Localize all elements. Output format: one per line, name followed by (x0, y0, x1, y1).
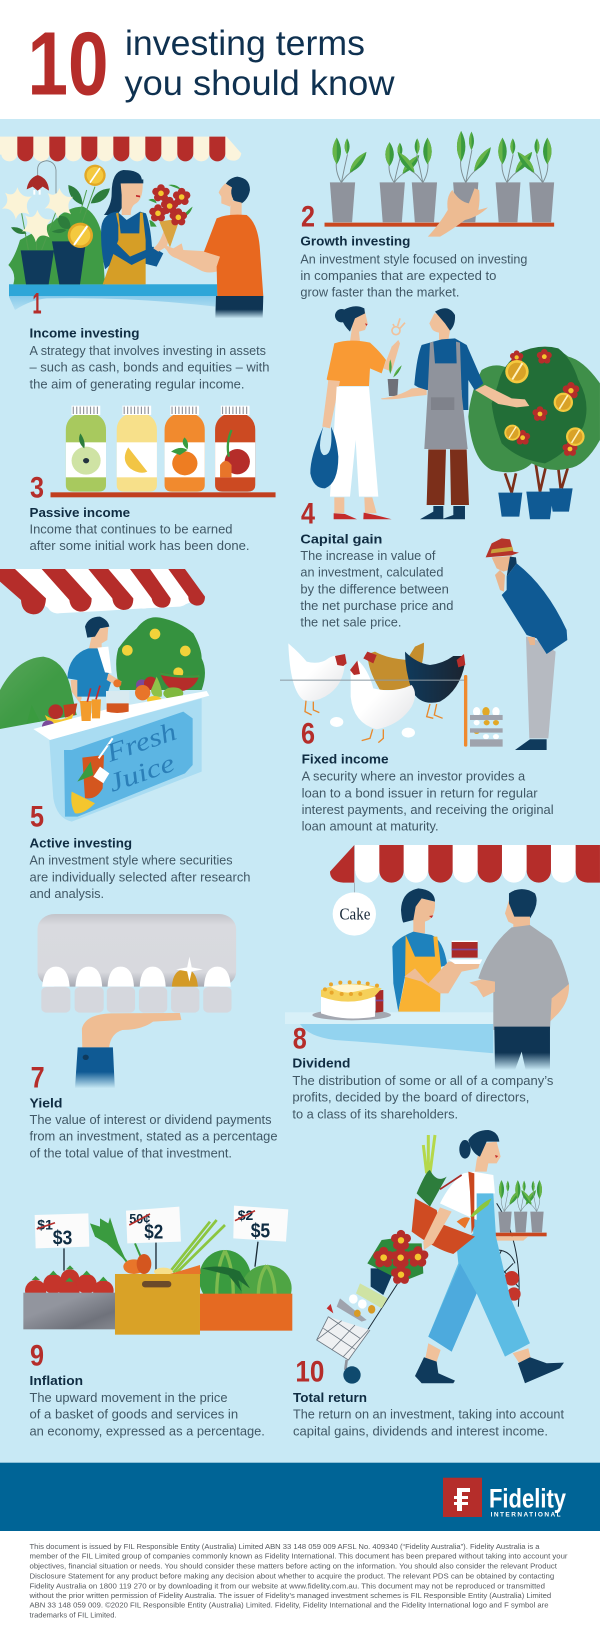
body text: in companies that are expected to (300, 269, 496, 283)
tomatoes (25, 1265, 114, 1301)
brown hen (363, 643, 424, 690)
juice seller (67, 617, 122, 703)
body text (300, 549, 453, 630)
body text: an economy, expressed as a percentage. (30, 1424, 265, 1438)
small plant and hand (381, 359, 427, 399)
illustration: produce crates (23, 1206, 292, 1335)
body text: A security where an investor provides a (302, 770, 525, 784)
body text (293, 1408, 565, 1438)
arm (423, 1207, 452, 1250)
panel: 5 Active investing (0, 569, 251, 901)
price labels: $1 (37, 1216, 53, 1232)
logo (443, 1478, 482, 1517)
heading: Passive income (30, 505, 130, 520)
number 9: 9 (30, 1339, 44, 1372)
woman (310, 306, 405, 519)
number 10: 10 (295, 1356, 324, 1389)
money tree (468, 347, 600, 519)
tray (41, 987, 232, 1013)
fruit tree (116, 617, 205, 690)
fence wire (280, 679, 465, 682)
price labels: $2 (238, 1207, 253, 1223)
body text: loan amount at maturity. (302, 820, 439, 834)
heading: Total return (293, 1390, 367, 1405)
price labels (37, 1207, 270, 1249)
body text: by the difference between (300, 582, 449, 596)
shelf (325, 223, 554, 227)
sign (333, 883, 376, 936)
illustration: plants on shelf (325, 131, 554, 237)
pots (21, 250, 54, 284)
body text: The return on an investment, taking into account (293, 1408, 565, 1422)
illustration: woman with trolley (317, 1130, 564, 1384)
disclaimer: This document is issued by FIL Responsible Entity (Australia) Limited ABN 33 148 059 009 AFSL No. 409340 (“Fidelity Australia”). Fidelity Australia is a (30, 1542, 540, 1551)
icon: F symbol (454, 1488, 470, 1511)
awning (0, 569, 205, 614)
disclaimer: Fidelity Australia on 1800 119 270 or by downloading it from our website at www.fidelity.com.au. This document may not be reproduced or transmitted (30, 1581, 545, 1590)
black hen (405, 652, 465, 718)
shirt (440, 1172, 495, 1220)
heading: Active investing (30, 836, 132, 850)
sign lettering: Juice (105, 748, 178, 798)
body text (30, 1391, 265, 1438)
disclaimer: trademarks of FIL Limited. (30, 1611, 116, 1620)
green bush (0, 657, 77, 729)
title: you should know (124, 64, 395, 103)
body text: A strategy that involves investing in assets (30, 344, 266, 358)
shoulder bag (412, 1135, 492, 1254)
lemon (125, 447, 147, 473)
body text: the net sale price. (300, 616, 401, 630)
number 6: 6 (301, 717, 315, 750)
body text (302, 770, 554, 834)
body text: of the total value of that investment. (30, 1146, 232, 1160)
man (414, 308, 529, 519)
illustration: couple and money tree (310, 306, 600, 519)
body text: The upward movement in the price (30, 1391, 228, 1405)
eggs (330, 717, 415, 738)
body text (300, 252, 527, 299)
price signs (35, 1206, 288, 1248)
number 3: 3 (30, 471, 44, 504)
title: 10 (28, 14, 108, 114)
egg crate (470, 707, 503, 747)
head (459, 1130, 501, 1172)
panel: 2 Growth investing (300, 131, 554, 299)
post (464, 675, 467, 747)
cake slice (448, 941, 482, 964)
sign lettering: Fresh (101, 717, 180, 768)
watermelons (199, 1250, 292, 1312)
body text: after some initial work has been done. (30, 539, 249, 553)
lilies (2, 187, 32, 219)
carrots and greens (90, 1217, 225, 1276)
body text (30, 522, 249, 553)
heading: Fixed income (302, 752, 389, 767)
fruit (27, 672, 200, 733)
illustration: egg carton on hand (38, 914, 236, 1088)
body text: of a basket of goods and services in (30, 1408, 238, 1422)
logo subtitle: INTERNATIONAL (491, 1512, 561, 1519)
illustration: cake stall (285, 845, 600, 1070)
number 4: 4 (301, 497, 315, 530)
body text: – such as cash, bonds and equities – with (30, 361, 270, 375)
body text (30, 1113, 278, 1160)
number 1: 1 (32, 287, 42, 320)
body text: profits, decided by the board of directors, (292, 1091, 529, 1105)
panel: 7 Yield (30, 914, 278, 1160)
tray with plants (495, 1180, 547, 1241)
tomato (220, 430, 250, 477)
number 8: 8 (293, 1022, 307, 1055)
bouquet (148, 184, 193, 247)
panel: 1 Income investing (0, 137, 270, 391)
hand (428, 188, 488, 237)
body text: the aim of generating regular income. (30, 377, 245, 391)
number 7: 7 (31, 1061, 45, 1094)
counter (285, 1012, 493, 1053)
apple (72, 433, 101, 475)
panel: 10 Total return (293, 1130, 565, 1438)
sign lettering (101, 717, 180, 798)
illustration: flower stall (0, 137, 263, 318)
body text: and analysis. (30, 887, 104, 901)
body text: The value of interest or dividend payments (30, 1113, 272, 1127)
trolley (317, 1268, 397, 1384)
sign text: Cake (340, 904, 370, 923)
eggs (42, 957, 231, 987)
net bag (497, 1203, 521, 1307)
body text: to a class of its shareholders. (292, 1107, 458, 1121)
bush (8, 207, 105, 284)
disclaimer (28, 1542, 568, 1620)
sign board (64, 712, 193, 817)
shelf (51, 492, 276, 497)
server woman (392, 888, 480, 1012)
jars (66, 406, 255, 492)
heading: Growth investing (300, 234, 410, 249)
crates (23, 1293, 115, 1329)
panel: 3 Passive income (30, 406, 276, 553)
counter (49, 698, 202, 822)
awning (0, 137, 241, 161)
heading: Yield (30, 1095, 63, 1110)
heading: Capital gain (300, 531, 382, 546)
customer (163, 177, 263, 318)
title: investing terms (125, 24, 365, 63)
disclaimer: Disclosure Statement for any product before making any decision about whether to acquire the product. The relevant PDS can be obtained by contacting (30, 1571, 554, 1580)
body text: The increase in value of (300, 549, 436, 563)
illustration: hens and old man (280, 538, 567, 750)
green leaves (11, 185, 110, 234)
body text: an investment, calculated (300, 566, 443, 580)
body text (30, 854, 251, 901)
coins (84, 165, 106, 186)
overalls (428, 1175, 530, 1357)
panel: 6 Fixed income (280, 538, 567, 834)
white hen front (350, 661, 415, 743)
panel: 8 Dividend (285, 845, 600, 1121)
price labels: $5 (251, 1219, 270, 1242)
drinks on counter (80, 679, 129, 721)
footer band (0, 1463, 600, 1531)
price labels: $2 (144, 1221, 163, 1244)
number 2: 2 (301, 201, 315, 234)
heading: Inflation (30, 1373, 83, 1388)
bouquet (367, 1230, 428, 1284)
sign posts (64, 1242, 258, 1273)
price labels: $3 (53, 1226, 72, 1249)
number 5: 5 (30, 801, 44, 834)
hanging flower (27, 161, 56, 195)
body text: from an investment, stated as a percentage (30, 1130, 278, 1144)
logo wordmark: Fidelity (489, 1483, 566, 1513)
body text: The distribution of some or all of a company’s (292, 1074, 553, 1088)
body text: Income that continues to be earned (30, 522, 233, 536)
customer (469, 889, 569, 1070)
price labels: 50¢ (129, 1210, 150, 1226)
florist woman (101, 170, 170, 284)
heading: Income investing (30, 326, 140, 341)
orange (171, 437, 197, 475)
body text: An investment style focused on investing (300, 252, 527, 266)
body text (30, 344, 270, 391)
old man (486, 538, 567, 750)
hand (82, 1013, 181, 1047)
body text: capital gains, dividends and interest income. (293, 1424, 548, 1438)
illustration: juice stand (0, 569, 209, 822)
disclaimer: objectives, financial situation or needs. You should consider these matters before acting on the information. You should also consider the relevant Product (30, 1562, 558, 1571)
body text: loan to a bond issuer in return for regular (302, 786, 538, 800)
juice glass (71, 738, 113, 814)
title (28, 14, 395, 114)
disclaimer: without the prior written permission of Fidelity Australia. The issuer of Fidelity’s managed investment schemes is FIL Responsible Entity (Australia) Limited (28, 1591, 551, 1600)
heading: Dividend (292, 1056, 350, 1071)
illustration: jars on shelf (51, 406, 276, 497)
carton lid (38, 914, 236, 987)
disclaimer: ABN 33 148 059 009. ©2020 FIL Responsible Entity (Australia) Limited. Fidelity, Fidelity International and the Fidelity International logo and F symbol are (30, 1601, 548, 1610)
pots (330, 182, 554, 222)
cake (312, 980, 391, 1020)
awning (330, 845, 600, 883)
plants (333, 131, 551, 183)
panel: 9 Inflation (23, 1206, 292, 1438)
body text: An investment style where securities (30, 854, 232, 868)
body text: are individually selected after research (30, 870, 251, 884)
body text (292, 1074, 553, 1121)
panel: 4 Capital gain (300, 306, 600, 630)
body text: grow faster than the market. (300, 285, 459, 299)
body text: interest payments, and receiving the original (302, 803, 554, 817)
legs and shoes (425, 1343, 532, 1363)
cuff (75, 1047, 115, 1088)
body text: the net purchase price and (300, 599, 453, 613)
white hen left (288, 643, 347, 715)
disclaimer: member of the FIL Limited group of companies commonly known as Fidelity International. This document has been prepared without taking into account your (30, 1552, 568, 1561)
